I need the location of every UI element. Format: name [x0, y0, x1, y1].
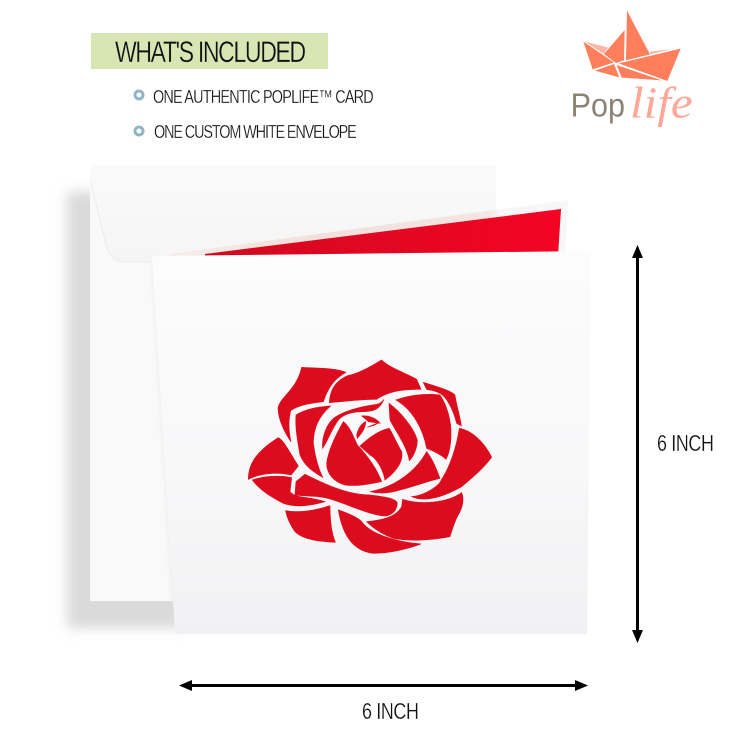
- inner card with red lining: [170, 200, 568, 256]
- petal: right inner: [396, 394, 451, 459]
- logo word: Pop: Pop: [571, 88, 625, 125]
- label: horizontal 6 inch: 6 INCH: [362, 699, 419, 725]
- list item: card: ONE AUTHENTIC POPLIFE™ CARD: [153, 86, 374, 107]
- petal: bottom left: [286, 506, 335, 542]
- petal: bottom centre: [338, 510, 421, 553]
- petal: middle band: [295, 474, 397, 516]
- arrow: vertical 6 inch dimension: [632, 245, 643, 643]
- arrow: horizontal 6 inch dimension: [179, 680, 588, 691]
- envelope flap: [90, 165, 496, 262]
- red lining: [205, 209, 561, 256]
- icon: bullet two: [135, 127, 143, 135]
- petal: middle right band: [370, 452, 440, 493]
- petal: left outer: [248, 438, 298, 479]
- petal: top centre: [329, 360, 421, 403]
- card shadow on envelope: [152, 262, 178, 600]
- petal: centre left: [327, 422, 382, 485]
- label: vertical 6 inch: 6 INCH: [657, 431, 714, 457]
- icon: origami boat: [583, 11, 681, 81]
- heading: WHAT'S INCLUDED: [115, 35, 306, 69]
- logo: Poplife: [571, 11, 693, 127]
- petal: left inner: [296, 406, 331, 477]
- panel: what's included: [91, 33, 374, 142]
- heading background: [91, 33, 328, 69]
- envelope: [90, 165, 496, 601]
- envelope shadow: [67, 192, 187, 628]
- petal: centre right crescent: [389, 403, 417, 461]
- rose illustration: [248, 360, 492, 553]
- petal: centre: [360, 428, 402, 480]
- petal: bud: [357, 416, 380, 438]
- petal: lower left: [252, 476, 325, 506]
- logo word: life: life: [630, 78, 693, 127]
- inner card white edge: [170, 200, 568, 256]
- list item: envelope: ONE CUSTOM WHITE ENVELOPE: [154, 121, 357, 142]
- petal: inner arc: [323, 399, 384, 448]
- petal: top right: [423, 382, 461, 426]
- flap shadow: [91, 183, 160, 262]
- icon: bullet one: [135, 91, 143, 99]
- envelope body: [90, 165, 496, 601]
- front card: [152, 251, 591, 634]
- petal: bottom right: [367, 493, 463, 540]
- petal: top left: [278, 367, 346, 442]
- petal: right outer: [412, 428, 492, 499]
